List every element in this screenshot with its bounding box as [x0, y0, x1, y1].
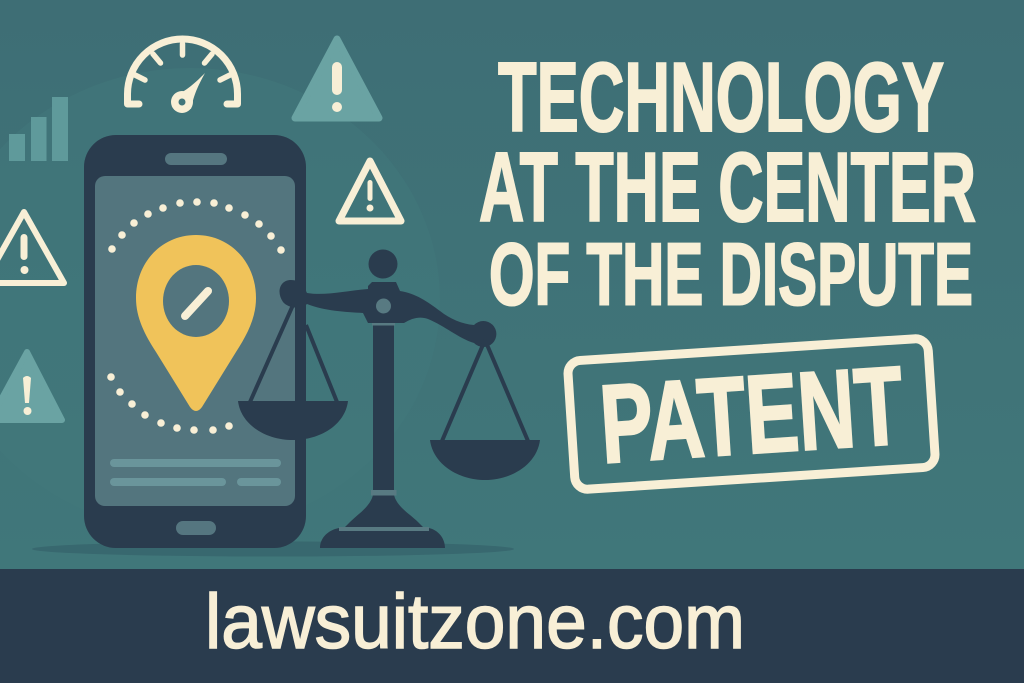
footer website: lawsuitzone.com — [205, 579, 745, 665]
location pin — [136, 235, 256, 411]
scale post — [373, 325, 394, 493]
smartphone — [84, 135, 306, 548]
icon: outlined warning triangle right — [339, 161, 401, 221]
icon: outlined warning triangle left — [0, 212, 64, 283]
scale top ball — [368, 250, 398, 278]
phone speaker — [165, 153, 227, 165]
scales of justice — [238, 250, 540, 548]
left pan — [238, 401, 348, 440]
phone screen — [95, 176, 295, 506]
icon: speedometer gauge — [128, 39, 238, 113]
footer bar — [0, 569, 1024, 683]
right pan — [430, 440, 540, 480]
icon: filled warning triangle top — [295, 39, 379, 118]
screen text lines — [110, 459, 281, 486]
dotted circle — [107, 198, 285, 434]
patent stamp — [567, 338, 936, 490]
right pan strings — [442, 340, 528, 441]
ground shadow — [32, 542, 514, 556]
phone home button — [176, 521, 216, 535]
left pan strings — [250, 305, 337, 402]
icon: filled warning triangle left — [0, 352, 62, 420]
scale beam — [280, 280, 496, 347]
scale hub — [376, 298, 391, 314]
stamp text: PATENT — [596, 343, 907, 487]
icon: bar chart — [9, 97, 68, 161]
title — [479, 42, 976, 324]
scale base — [345, 495, 423, 527]
